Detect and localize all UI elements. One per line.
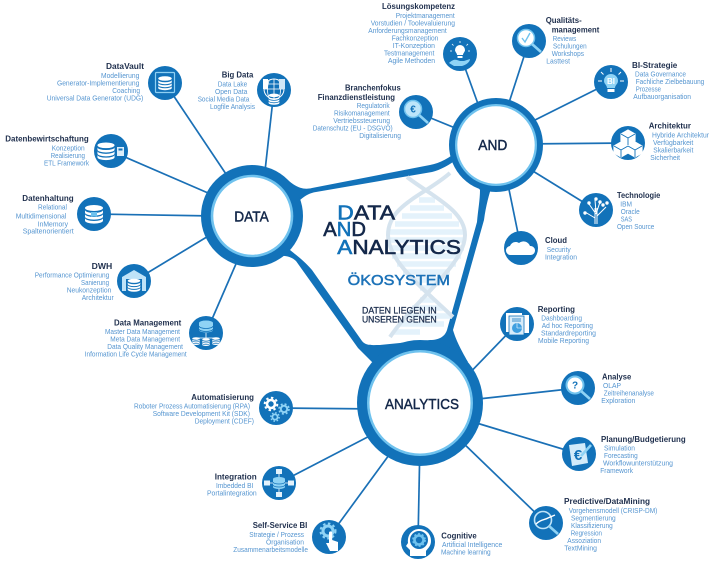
text: Lösungskompetenz: Fachkonzeption bbox=[392, 34, 438, 42]
text: Technologie bbox=[617, 190, 660, 231]
icon: gears bbox=[259, 391, 293, 425]
text: Self-Service BI: Self-Service BI bbox=[253, 520, 307, 530]
text: DataVault: Universal Data Generator (UDG) bbox=[47, 94, 143, 103]
text: Predictive/DataMining: Predictive/DataMining bbox=[564, 496, 650, 506]
icon: database with four satellites bbox=[262, 466, 296, 500]
text: Automatisierung: Deployment (CDEF) bbox=[195, 416, 254, 426]
node: Lösungskompetenz bbox=[368, 1, 477, 71]
icon: check magnifier bbox=[512, 24, 546, 58]
text: DataVault: Coaching bbox=[112, 86, 140, 95]
text: DWH bbox=[35, 261, 114, 302]
node: Datenhaltung bbox=[16, 193, 111, 236]
node: Analyse bbox=[561, 371, 654, 405]
text: Integration: Imbedded BI bbox=[216, 481, 253, 490]
text: Predictive/DataMining: Vorgehensmodell (CRISP-DM) bbox=[569, 506, 657, 515]
text: DataVault: Modellierung bbox=[101, 71, 139, 80]
text: Technologie: IBM bbox=[620, 200, 632, 208]
hub: ANALYTICS bbox=[357, 340, 483, 466]
text: Planung/Budgetierung bbox=[600, 434, 686, 475]
text: Big Data: Social Media Data bbox=[198, 94, 249, 104]
text: Qualitätsmanagement bbox=[546, 15, 599, 66]
central title bbox=[323, 202, 461, 259]
central title: AND bbox=[323, 219, 366, 241]
text: Analyse: Exploration bbox=[601, 396, 635, 405]
text: Big Data: Data Lake bbox=[218, 80, 247, 88]
text: Planung/Budgetierung: Planung/Budgetierung bbox=[601, 434, 686, 444]
icon: report pages with pie bbox=[500, 307, 534, 341]
icon: circuit tree bbox=[579, 193, 613, 227]
tagline bbox=[362, 305, 437, 325]
node: DataVault bbox=[47, 61, 182, 103]
icon: question magnifier: ? bbox=[572, 380, 578, 392]
text: Cloud: Security bbox=[547, 245, 571, 254]
icon: cloud bbox=[504, 231, 538, 265]
hub: AND: AND bbox=[478, 138, 507, 154]
text: Cognitive: Artificial Intelligence bbox=[442, 540, 502, 549]
text: DWH: Performance Optimierung bbox=[35, 271, 109, 280]
text: Automatisierung: Roboter Prozess Automatisierung (RPA) bbox=[134, 402, 250, 410]
text: DataVault: Generator-Implementierung bbox=[57, 79, 139, 88]
icon: database bbox=[77, 197, 111, 231]
text: BI-Strategie: Prozesse bbox=[636, 85, 661, 94]
icon: gear and finger bbox=[312, 520, 346, 554]
text: Lösungskompetenz: Lösungskompetenz bbox=[382, 1, 455, 11]
text: DataVault: DataVault bbox=[106, 61, 144, 71]
text: Branchenfokus bbox=[313, 82, 401, 140]
text: BI-Strategie: Aufbauorganisation bbox=[633, 92, 691, 101]
hub: AND bbox=[449, 98, 543, 192]
text: Reporting bbox=[538, 304, 596, 345]
network interior bbox=[290, 158, 480, 345]
text: Technologie: SAS bbox=[621, 214, 632, 224]
node: Predictive/DataMining bbox=[529, 496, 657, 552]
hub network band bbox=[278, 150, 492, 362]
text: Analyse: Zeitreihenanalyse bbox=[604, 388, 654, 398]
text: Cognitive bbox=[441, 530, 502, 556]
text: Reporting: Standardreporting bbox=[541, 329, 596, 338]
text: Cognitive: Cognitive bbox=[441, 530, 477, 540]
text: Planung/Budgetierung: Workflowunterstützung bbox=[603, 459, 673, 468]
icon: light bulb in hand bbox=[443, 37, 477, 71]
text: Lösungskompetenz: Projektmanagement bbox=[396, 11, 455, 20]
text: Cloud bbox=[545, 235, 577, 262]
text: Planung/Budgetierung: Simulation bbox=[604, 444, 635, 453]
text: Branchenfokus: Digitalisierung bbox=[359, 131, 401, 140]
text: Technologie: Oracle bbox=[621, 207, 640, 216]
icon: euro clipboard: € bbox=[574, 447, 583, 464]
text: DWH: Sanierung bbox=[81, 278, 109, 287]
text: Automatisierung: Automatisierung bbox=[191, 392, 254, 402]
text: Data Management: Master Data Management bbox=[105, 327, 180, 336]
text: Datenhaltung bbox=[16, 193, 74, 236]
text: Lösungskompetenz: Agile Methoden bbox=[388, 56, 435, 65]
node: Cloud bbox=[504, 231, 577, 265]
text: BI-Strategie: BI-Strategie bbox=[632, 60, 678, 70]
text: Datenhaltung: Spaltenorientiert bbox=[23, 227, 74, 236]
text: Architektur: Sicherheit bbox=[650, 153, 680, 162]
text: Integration: Integration bbox=[215, 472, 257, 482]
text: DWH: Neukonzeption bbox=[67, 286, 111, 295]
text: Predictive/DataMining: Klassifizierung bbox=[571, 521, 613, 530]
hub: ANALYTICS: ANALYTICS bbox=[385, 397, 459, 413]
node: DWH bbox=[35, 261, 151, 302]
icon: globe with database bbox=[257, 73, 291, 107]
text: Branchenfokus: Risikomanagement bbox=[334, 108, 390, 118]
text: Branchenfokus: Branchenfokus bbox=[345, 82, 401, 92]
text: Architektur: Architektur bbox=[649, 120, 692, 130]
text: Branchenfokus: Datenschutz (EU - DSGVO) bbox=[313, 124, 393, 132]
DNA helix illustration bbox=[388, 173, 465, 337]
text: Cognitive: Machine learning bbox=[441, 548, 491, 556]
icon: database hierarchy bbox=[189, 316, 223, 350]
node: Architektur bbox=[611, 120, 710, 162]
text: Reporting: Dashboarding bbox=[541, 314, 582, 323]
text: Analyse: OLAP bbox=[603, 381, 621, 390]
text: Architektur bbox=[649, 120, 710, 162]
node: Technologie bbox=[579, 190, 660, 231]
text: Predictive/DataMining: Assoziation bbox=[567, 536, 601, 545]
text: Data Management: Meta Data Management bbox=[110, 335, 180, 344]
node: Data Management bbox=[85, 316, 223, 359]
hub: DATA bbox=[201, 165, 303, 267]
text: Cloud: Integration bbox=[545, 252, 577, 262]
text: Automatisierung: Software Development Kit (SDK) bbox=[153, 409, 250, 418]
text: Integration: Portalintegration bbox=[207, 488, 257, 498]
text: Data Management: Information Life Cycle Management bbox=[85, 350, 187, 359]
text: Datenbewirtschaftung: Datenbewirtschaftung bbox=[5, 134, 89, 144]
node: BI-Strategie bbox=[594, 60, 704, 101]
node: Cognitive bbox=[401, 525, 502, 559]
icon: euro magnifier: € bbox=[410, 104, 416, 116]
text: Branchenfokus: Finanzdienstleistung bbox=[318, 92, 395, 102]
text: Datenbewirtschaftung bbox=[5, 134, 89, 168]
text: Reporting: Ad hoc Reporting bbox=[542, 321, 593, 330]
icon: BI light bulb: BI bbox=[607, 77, 615, 86]
text: Qualitätsmanagement: Reviews bbox=[553, 34, 577, 43]
text: Lösungskompetenz: Anforderungsmanagement bbox=[368, 26, 447, 35]
text: Qualitätsmanagement: Schulungen bbox=[553, 42, 587, 50]
text: Lösungskompetenz: IT-Konzeption bbox=[393, 41, 435, 50]
text: Planung/Budgetierung: Framework bbox=[600, 466, 633, 475]
text: Qualitätsmanagement: Lasttest bbox=[546, 56, 570, 66]
text: Lösungskompetenz: Vorstudien / Toolevaluierung bbox=[371, 18, 455, 28]
icon: safe with database bbox=[148, 66, 182, 100]
text: Big Data bbox=[198, 70, 255, 111]
node: Branchenfokus bbox=[313, 82, 433, 140]
text: Datenbewirtschaftung: Realisierung bbox=[51, 151, 85, 160]
text: Architektur: Skalierbarkeit bbox=[653, 146, 693, 154]
text: Qualitätsmanagement: management bbox=[552, 24, 599, 34]
text: Technologie: Open Source bbox=[617, 222, 654, 231]
node: Big Data bbox=[198, 70, 291, 111]
text: Data Management: Data Quality Management bbox=[107, 342, 183, 351]
text: Big Data: Big Data bbox=[222, 70, 253, 80]
text: Self-Service BI: Zusammenarbeitsmodelle bbox=[233, 545, 308, 554]
node: Datenbewirtschaftung bbox=[5, 134, 128, 168]
text: BI-Strategie: Fachliche Zielbebauung bbox=[636, 77, 704, 86]
subtitle: Ökosystem: ÖKOSYSTEM bbox=[348, 271, 450, 289]
text: Automatisierung bbox=[134, 392, 254, 426]
node: Self-Service BI bbox=[233, 520, 346, 554]
text: DWH: Architektur bbox=[82, 293, 114, 302]
text: Big Data: Open Data bbox=[215, 87, 247, 96]
text: Qualitätsmanagement: Workshops bbox=[552, 49, 584, 58]
text: DataVault bbox=[47, 61, 144, 103]
text: Cloud: Cloud bbox=[545, 235, 567, 245]
text: Planung/Budgetierung: Forecasting bbox=[604, 451, 638, 460]
text: Technologie: Technologie bbox=[617, 190, 660, 200]
text: Analyse bbox=[601, 372, 654, 405]
text: Data Management: Data Management bbox=[114, 318, 181, 328]
text: Lösungskompetenz: Testmanagement bbox=[384, 48, 434, 58]
text: Self-Service BI: Strategie / Prozess bbox=[249, 530, 304, 539]
text: Self-Service BI: Organisation bbox=[266, 538, 304, 546]
connector lines bbox=[94, 41, 628, 542]
node: Planung/Budgetierung bbox=[562, 434, 686, 475]
icon: database and document bbox=[94, 134, 128, 168]
node: Automatisierung bbox=[134, 391, 293, 426]
text: Predictive/DataMining bbox=[564, 496, 657, 552]
text: Qualitätsmanagement: Qualitäts- bbox=[546, 15, 582, 25]
text: DWH: DWH bbox=[92, 261, 112, 271]
text: Datenhaltung: Multidimensional bbox=[16, 212, 67, 221]
text: Data Management bbox=[85, 318, 187, 359]
icon: head with gear bbox=[401, 525, 435, 559]
text: Predictive/DataMining: TextMining bbox=[564, 544, 597, 552]
icon: warehouse bbox=[117, 264, 151, 298]
node: Integration bbox=[207, 466, 296, 500]
text: Reporting: Reporting bbox=[538, 304, 575, 314]
text: BI-Strategie bbox=[632, 60, 704, 101]
text: Datenhaltung: Relational bbox=[38, 203, 67, 212]
text: Branchenfokus: Regulatorik bbox=[357, 101, 390, 110]
text: Predictive/DataMining: Segmentierung bbox=[571, 514, 616, 522]
tagline: DATEN LIEGEN IN bbox=[362, 305, 437, 315]
text: Datenbewirtschaftung: ETL Framework bbox=[44, 158, 89, 168]
hub: DATA: DATA bbox=[234, 209, 269, 225]
text: Branchenfokus: Vertriebssteuerung bbox=[333, 116, 390, 125]
text: Self-Service BI bbox=[233, 520, 308, 554]
text: Lösungskompetenz bbox=[368, 1, 455, 65]
icon: trend magnifier bbox=[529, 506, 563, 540]
text: Architektur: Verfügbarkeit bbox=[653, 138, 693, 147]
text: Analyse: Analyse bbox=[602, 372, 631, 382]
text: Datenbewirtschaftung: Konzeption bbox=[52, 144, 85, 152]
text: Integration bbox=[207, 472, 257, 498]
central title: DATA bbox=[337, 202, 396, 224]
central title: ANALYTICS bbox=[337, 237, 461, 259]
icon: cubes bbox=[611, 126, 645, 160]
text: Predictive/DataMining: Regression bbox=[571, 528, 602, 538]
tagline: UNSEREN GENEN bbox=[362, 315, 437, 325]
text: BI-Strategie: Data Governance bbox=[635, 70, 686, 79]
node: Reporting bbox=[500, 304, 596, 345]
node: Qualitätsmanagement bbox=[512, 15, 599, 66]
text: Datenhaltung: Datenhaltung bbox=[22, 193, 74, 203]
text: Big Data: Logfile Analysis bbox=[210, 102, 255, 111]
text: Architektur: Hybride Architektur bbox=[652, 130, 710, 140]
text: Reporting: Mobile Reporting bbox=[538, 336, 589, 345]
text: Datenhaltung: InMemory bbox=[38, 219, 68, 228]
